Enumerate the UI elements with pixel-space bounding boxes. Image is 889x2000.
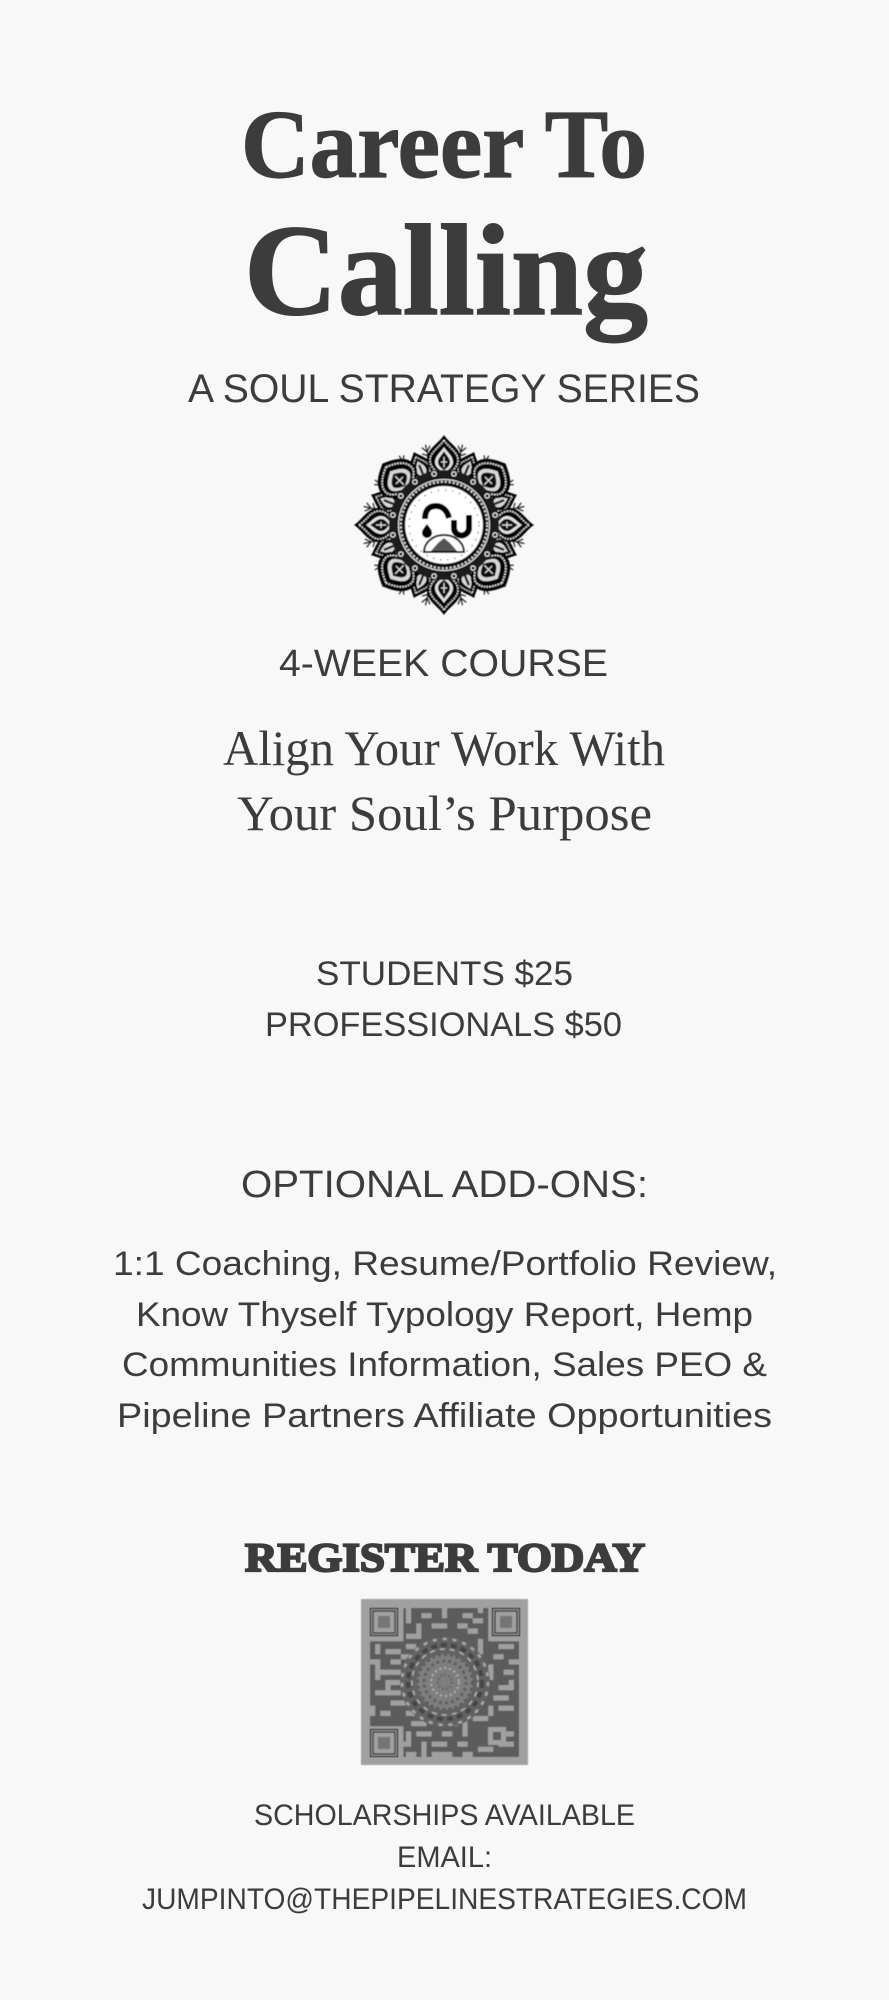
add-ons list: Know Thyself Typology Report, Hemp [136,1296,753,1334]
tagline line 2: Your Soul’s Purpose [237,785,652,841]
title line: Calling: Calling [244,199,648,343]
title [241,91,648,343]
price: professionals: PROFESSIONALS $50 [265,1006,622,1044]
icon: mandala logo [354,435,534,615]
water drop [422,524,432,538]
email address: JUMPINTO@THEPIPELINESTRATEGIES.COM [142,1883,747,1916]
QR light modules [370,1608,519,1757]
QR code [361,1599,528,1765]
register heading: REGISTER TODAY [245,1535,645,1580]
pipe symbol [425,506,469,536]
tagline line 1: Align Your Work With [223,720,665,776]
tagline [223,720,665,841]
scholarships line: SCHOLARSHIPS AVAILABLE [254,1799,635,1832]
QR alignment square [488,1727,506,1745]
email label: EMAIL: [397,1841,492,1874]
price: students: STUDENTS $25 [316,955,573,993]
course label: 4-WEEK COURSE [279,643,608,685]
lotus fan [424,535,464,552]
add-ons list: Pipeline Partners Affiliate Opportunities [117,1397,772,1435]
add-ons list: 1:1 Coaching, Resume/Portfolio Review, [113,1245,777,1283]
scholarship and contact [142,1799,747,1916]
title line: Career To: Career To [241,91,647,199]
subtitle: A SOUL STRATEGY SERIES [188,367,700,411]
QR finder squares [370,1608,520,1756]
pricing [265,955,622,1044]
add-ons list [113,1245,777,1435]
QR centre mandala [400,1637,490,1727]
add-ons heading: OPTIONAL ADD-ONS: [241,1164,648,1206]
add-ons list: Communities Information, Sales PEO & [122,1346,767,1384]
